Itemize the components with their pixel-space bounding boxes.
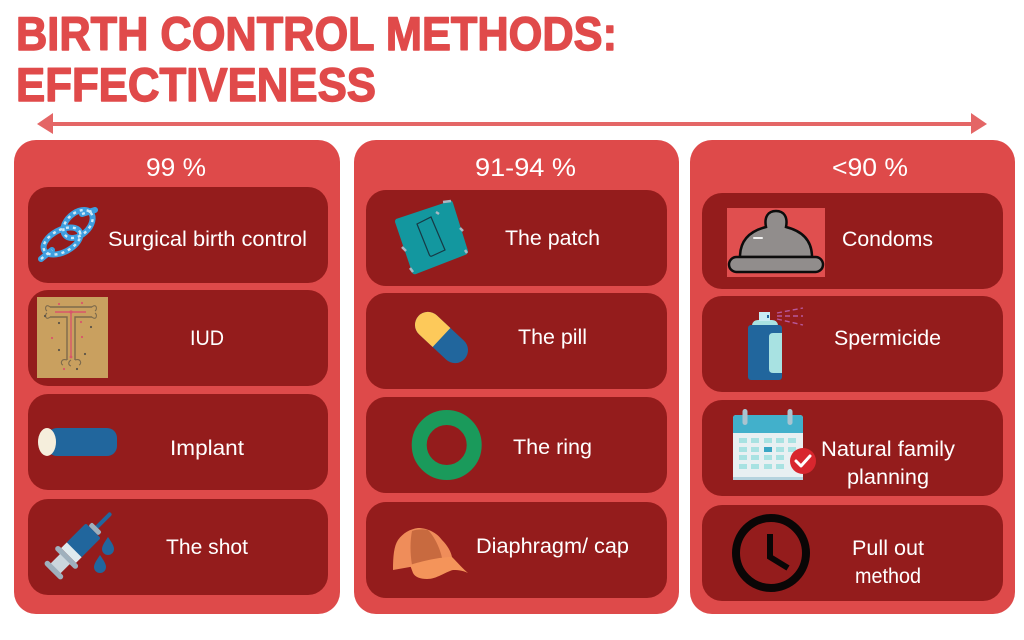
label: Diaphragm/ cap (476, 535, 629, 558)
label: Implant (170, 437, 244, 460)
row: condoms (702, 193, 1003, 289)
icon: ring (419, 418, 474, 472)
label: Pull out (852, 537, 924, 560)
row: implant (28, 394, 328, 490)
panel: 91-94 % (354, 140, 679, 614)
heading: 99 %: 99 % (146, 154, 206, 182)
icon: patch (395, 201, 468, 274)
label: Surgical birth control (108, 228, 307, 251)
icon: condom (727, 208, 825, 277)
icon: IUD on tan card (37, 297, 108, 378)
arrow: effectiveness scale (37, 113, 987, 134)
row: natural family planning (702, 400, 1003, 496)
icon: implant rod (38, 428, 117, 456)
row: surgical birth control (28, 187, 328, 283)
icon: rope knot (39, 204, 98, 260)
title: BIRTH CONTROL METHODS: (16, 7, 617, 60)
row: the shot (28, 499, 328, 595)
label line 2: planning (847, 466, 929, 489)
row: IUD (28, 290, 328, 386)
row: diaphragm / cap (366, 502, 667, 598)
label: Spermicide (834, 327, 941, 350)
icon: spray can (748, 308, 803, 380)
label: The shot (166, 536, 248, 559)
row: the pill (366, 293, 667, 389)
panel: 99 % (14, 140, 340, 614)
icon: clock (736, 518, 806, 588)
icon: syringe (41, 502, 122, 583)
title (16, 7, 617, 111)
title: EFFECTIVENESS (16, 58, 376, 111)
panel: <90 % (690, 140, 1015, 614)
label: IUD (190, 327, 224, 350)
icon: pill capsule (410, 307, 473, 368)
label: Natural family (821, 438, 956, 461)
label: Condoms (842, 228, 933, 251)
label: The patch (505, 227, 600, 250)
heading: 91-94 %: 91-94 % (475, 154, 576, 182)
row: the ring (366, 397, 667, 493)
icon: baseball cap (393, 528, 468, 579)
row: spermicide (702, 296, 1003, 392)
label: The pill (518, 326, 587, 349)
label: The ring (513, 436, 592, 459)
label line 2: method (855, 565, 921, 588)
row: pull out method (702, 505, 1003, 601)
row: the patch (366, 190, 667, 286)
icon: calendar (733, 409, 816, 480)
heading: <90 %: <90 % (832, 154, 908, 182)
